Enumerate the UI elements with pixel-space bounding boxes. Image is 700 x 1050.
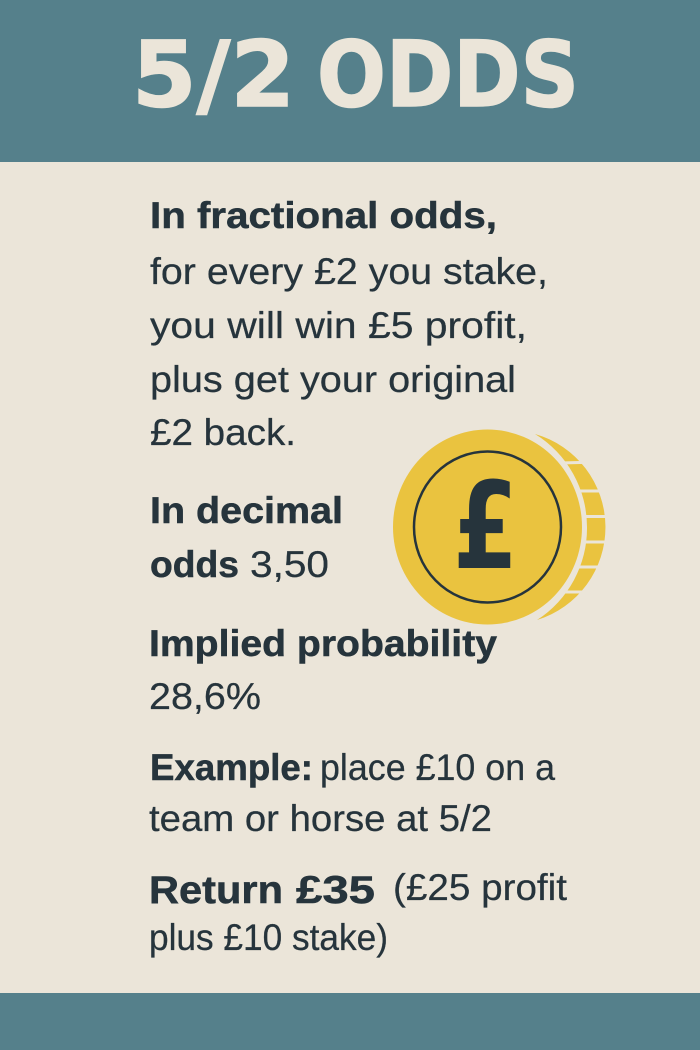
footer band [0,993,700,1050]
text block: return: Return [149,869,283,912]
title: 5/2 [132,23,295,128]
text block: example [149,747,555,839]
header band [0,0,700,162]
text block: fractional odds: plus get your original [150,359,516,400]
text block: fractional odds [150,195,548,453]
text block: return: plus £10 stake) [149,917,388,958]
icon: pound coin [393,430,606,624]
title: ODDS [317,23,579,128]
text block: return: £35 [296,869,375,912]
text block: fractional odds: £2 back. [150,412,296,453]
text block: decimal odds: In decimal [150,490,343,531]
text block: decimal odds: 3,50 [250,544,329,585]
text block: example: team or horse at 5/2 [149,798,492,839]
text block: return: (£25 profit [393,867,568,908]
text block: fractional odds: for every £2 you stake, [150,251,548,292]
text block: implied probability: 28,6% [149,676,261,717]
text block: return [149,867,568,958]
text block: implied probability [149,623,497,717]
text block: implied probability: Implied probability [149,623,497,664]
text block: example: Example: [150,747,313,788]
text block: fractional odds: In fractional odds, [150,195,497,236]
text block: decimal odds: odds [150,544,239,585]
text block: decimal odds [150,490,343,585]
text block: fractional odds: you will win £5 profit, [150,305,527,346]
text block: example: place £10 on a [320,747,555,788]
icon: pound sign: £ [453,458,518,597]
